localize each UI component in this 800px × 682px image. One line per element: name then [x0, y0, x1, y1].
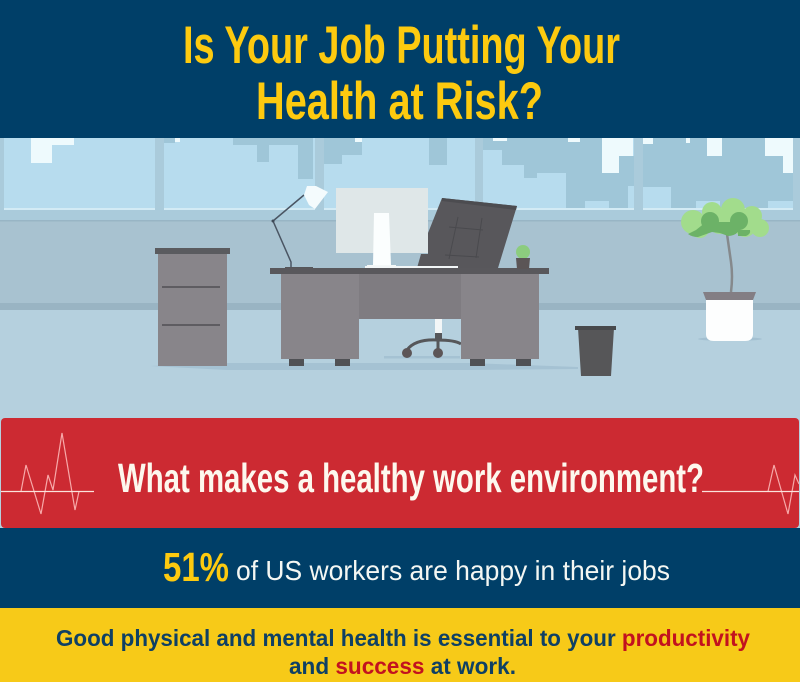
waste bin: [575, 326, 616, 376]
office chair: [384, 198, 517, 358]
panel: red banner: [0, 418, 800, 528]
back wall: [0, 220, 800, 304]
computer monitor: [336, 188, 428, 268]
small desk plant: [516, 245, 530, 269]
filing cabinet: [155, 248, 230, 366]
panel: title header: [0, 0, 800, 138]
desk lamp: [272, 186, 328, 269]
floor shadow: [150, 363, 578, 370]
stat caption: of US workers are happy in their jobs: [236, 555, 670, 586]
floor: [0, 310, 800, 418]
skirting: [0, 303, 800, 310]
skyline: [164, 138, 793, 208]
panel: statistic: [0, 528, 800, 608]
icon: left heartbeat line: [1, 433, 94, 514]
message text: and success at work.: [289, 653, 516, 679]
white sky patches: [31, 138, 793, 173]
message text: Good physical and mental health is essential to your productivity: [56, 625, 750, 651]
stat: 51%: 51%: [163, 544, 229, 590]
title: [183, 16, 620, 131]
title: Health at Risk?: [256, 72, 543, 131]
panel: yellow message: [0, 608, 800, 682]
potted plant: [681, 198, 769, 341]
icon: right heartbeat line: [702, 465, 799, 514]
desk: [270, 266, 549, 366]
message text: [56, 625, 750, 679]
title: Is Your Job Putting Your: [183, 16, 620, 75]
window wall: [0, 138, 800, 220]
window sills: [4, 208, 793, 210]
pale buildings: [585, 186, 793, 208]
panel: office illustration: [0, 138, 800, 418]
